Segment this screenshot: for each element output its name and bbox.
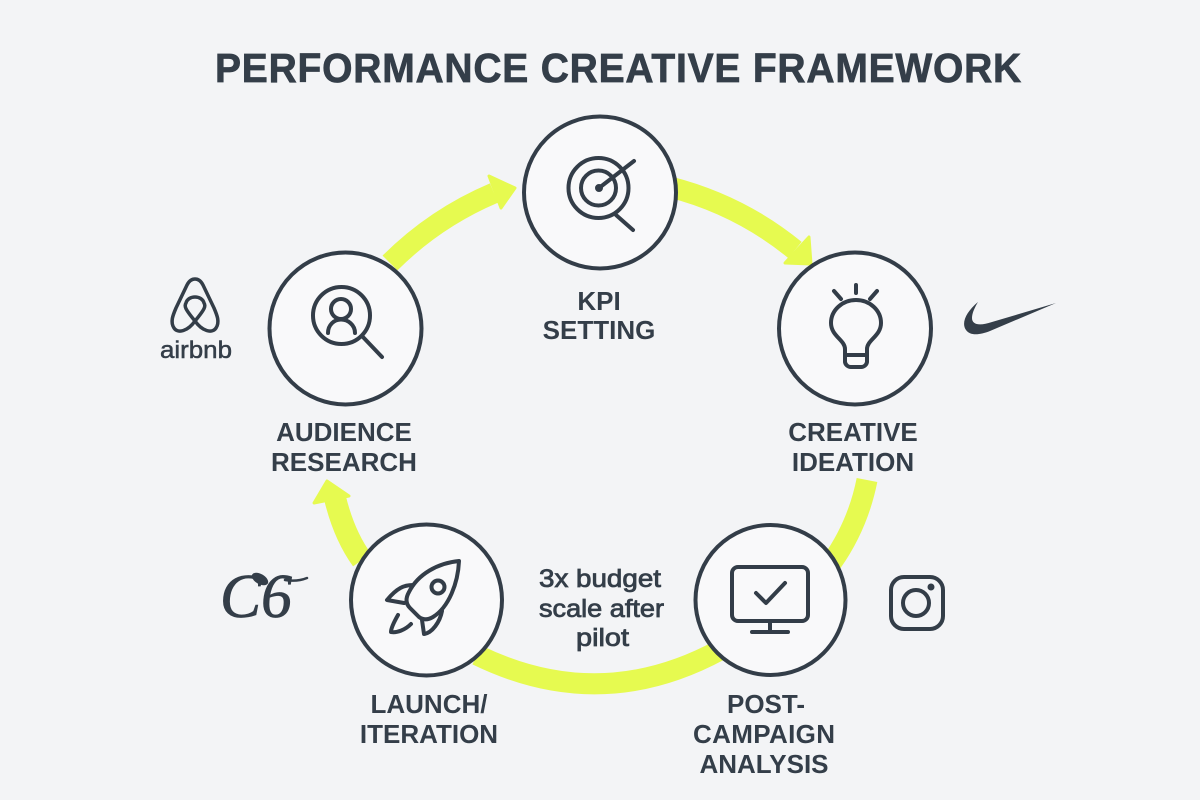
brand logo: airbnb: airbnb — [160, 337, 232, 364]
brand logo: coca-cola monogram: C6 — [220, 563, 292, 631]
label: launch and iteration: LAUNCH/ — [370, 689, 488, 719]
label: launch and iteration — [360, 689, 498, 749]
step: audience research — [270, 252, 422, 477]
step: KPI setting — [524, 116, 676, 345]
node circle: post-campaign — [696, 525, 846, 675]
arrow: launch to audience research — [314, 481, 362, 560]
icon: light bulb — [831, 285, 881, 367]
node circle: KPI — [524, 116, 676, 268]
label: creative ideation: IDEATION — [792, 447, 914, 477]
label: post-campaign analysis: CAMPAIGN — [693, 719, 835, 749]
icon: magnifier with person — [313, 287, 382, 357]
node circle: creative — [779, 252, 931, 404]
brand logo: airbnb — [160, 279, 232, 364]
label: post-campaign analysis: POST- — [727, 689, 805, 719]
title: PERFORMANCE CREATIVE FRAMEWORK — [215, 45, 1022, 91]
label: creative ideation: CREATIVE — [788, 417, 918, 447]
callout: budget scale note: pilot — [576, 624, 629, 652]
node circle: launch — [351, 524, 502, 676]
label: KPI setting — [543, 286, 655, 345]
callout: budget scale note: scale after — [539, 595, 664, 623]
brand logo: instagram — [891, 577, 943, 629]
label: KPI setting: KPI — [577, 286, 621, 316]
step: creative ideation — [779, 252, 931, 477]
step: post-campaign analysis — [693, 525, 846, 779]
icon: monitor with check — [732, 567, 808, 632]
arrow: KPI setting to creative ideation — [670, 187, 811, 264]
label: audience research: AUDIENCE — [276, 417, 412, 447]
label: post-campaign analysis: ANALYSIS — [699, 749, 829, 779]
step: launch and iteration — [351, 524, 502, 749]
label: audience research — [271, 417, 417, 477]
label: audience research: RESEARCH — [271, 447, 417, 477]
icon: target with arrow — [568, 158, 634, 230]
callout: budget scale note: 3x budget — [539, 565, 661, 593]
label: launch and iteration: ITERATION — [360, 719, 498, 749]
arrow: audience research to KPI setting — [390, 176, 515, 263]
label: post-campaign analysis — [693, 689, 835, 779]
arrow: creative ideation to post-campaign analysis — [832, 480, 867, 562]
brand logo: nike swoosh — [964, 302, 1056, 334]
label: KPI setting: SETTING — [543, 315, 655, 345]
icon: rocket — [387, 561, 459, 634]
callout: budget scale note — [539, 565, 664, 652]
node circle: audience — [270, 252, 422, 404]
arrow: post-campaign analysis to launch — [477, 650, 720, 684]
label: creative ideation — [788, 417, 918, 477]
